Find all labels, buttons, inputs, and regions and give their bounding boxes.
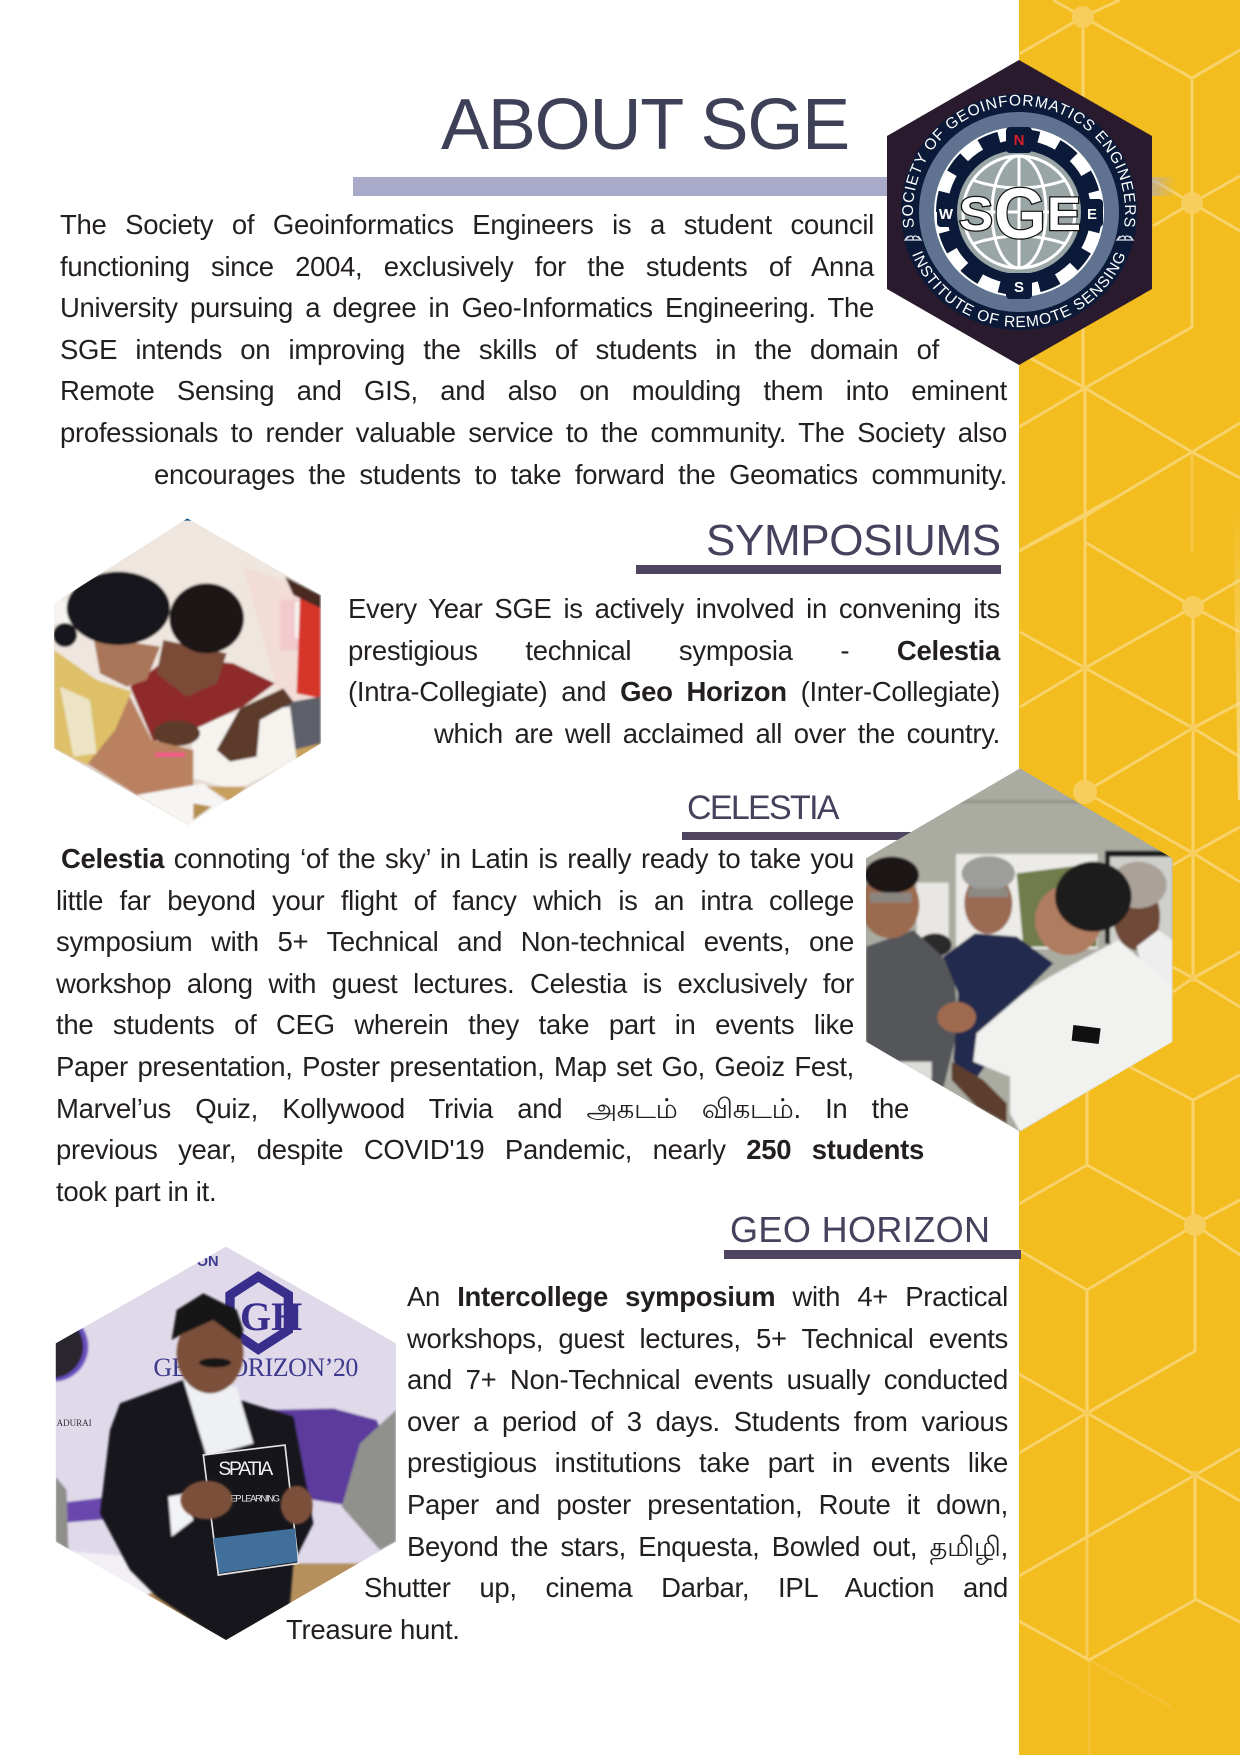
text block: geo horizon: workshops, guest lectures, 5+ Technical events <box>407 1323 1008 1354</box>
text block: celestia: took part in it. <box>56 1176 216 1207</box>
SGE wordmark: E <box>1047 187 1081 240</box>
photo: guest holding Spatia magazine: DEEP LEARNING <box>220 1494 280 1504</box>
compass tabs <box>937 127 1103 299</box>
text block: celestia: Paper presentation, Poster presentation, Map set Go, Geoiz Fest, <box>56 1051 854 1082</box>
text block: about SGE: The Society of Geoinformatics Engineers is a student council <box>60 209 874 240</box>
text block: about SGE <box>60 209 1008 490</box>
globe lines <box>963 156 1075 268</box>
logo: SGE hexagon emblem <box>887 60 1152 365</box>
text block: geo horizon: Shutter up, cinema Darbar, IPL Auction and <box>364 1572 1008 1603</box>
heading: celestia: CELESTIA <box>687 789 838 827</box>
text block: geo horizon: over a period of 3 days. Students from various <box>407 1406 1008 1437</box>
circular logo text: SOCIETY OF GEOINFORMATICS ENGINEERS <box>902 94 1136 228</box>
text block: geo horizon <box>286 1281 1008 1645</box>
compass letters: E <box>1087 206 1097 223</box>
text block: geo horizon: Paper and poster presentation, Route it down, <box>407 1489 1008 1520</box>
geo horizon underline bar <box>724 1250 1021 1259</box>
text block: celestia <box>56 843 924 1207</box>
title underline bar <box>353 177 887 196</box>
text block: about SGE: professionals to render valuable service to the community. The Society also <box>60 417 1007 448</box>
text block: celestia: Marvel’us Quiz, Kollywood Trivia and அகடம் விகடம். In the <box>56 1093 909 1124</box>
heading: symposiums: SYMPOSIUMS <box>706 516 1001 565</box>
text block: symposiums: Every Year SGE is actively involved in convening its <box>348 593 1000 624</box>
text block: geo horizon: Treasure hunt. <box>286 1614 460 1645</box>
text block: about SGE: encourages the students to take forward the Geomatics community. <box>154 459 1007 490</box>
text block: symposiums <box>348 593 1000 749</box>
text block: about SGE: functioning since 2004, exclusively for the students of Anna <box>60 251 874 282</box>
text block: geo horizon: Beyond the stars, Enquesta, Bowled out, தமிழி, <box>407 1531 1008 1562</box>
yellow hexagon side panel <box>1019 0 1240 1755</box>
text block: celestia: workshop along with guest lectures. Celestia is exclusively for <box>56 968 854 999</box>
symposiums underline bar <box>636 565 1001 574</box>
text block: about SGE: University pursuing a degree in Geo-Informatics Engineering. The <box>60 292 874 323</box>
celestia underline bar <box>682 832 912 840</box>
photo: guest holding Spatia magazine <box>56 1246 396 1640</box>
photo: professors in conversation <box>866 768 1173 1132</box>
text block: geo horizon: prestigious institutions take part in events like <box>407 1447 1008 1478</box>
title: ABOUT SGE <box>441 85 849 165</box>
circular logo text <box>902 94 1136 328</box>
photo: students working at a table <box>54 518 321 825</box>
photo: guest holding Spatia magazine: ADURAI <box>57 1418 92 1428</box>
text block: about SGE: SGE intends on improving the skills of students in the domain of <box>60 334 939 365</box>
photo: guest holding Spatia magazine: GH <box>240 1294 302 1339</box>
text block: celestia: the students of CEG wherein they take part in events like <box>56 1009 854 1040</box>
text block: symposiums: prestigious technical symposia - Celestia <box>348 635 1000 666</box>
SGE wordmark: S <box>959 187 993 240</box>
text block: symposiums: which are well acclaimed all over the country. <box>434 718 1000 749</box>
text block: about SGE: Remote Sensing and GIS, and also on moulding them into eminent <box>60 375 1007 406</box>
text block: celestia: little far beyond your flight of fancy which is an intra college <box>56 885 854 916</box>
text block: celestia: previous year, despite COVID'19 Pandemic, nearly 250 students <box>56 1134 924 1165</box>
compass letters: W <box>939 206 954 223</box>
heading: geo horizon: GEO HORIZON <box>730 1209 990 1250</box>
compass letters: S <box>1014 279 1024 296</box>
text block: celestia: symposium with 5+ Technical and Non-technical events, one <box>56 926 854 957</box>
text block: symposiums: (Intra-Collegiate) and Geo Horizon (Inter-Collegiate) <box>348 676 1000 707</box>
SGE wordmark <box>959 175 1081 254</box>
text block: celestia: Celestia connoting ‘of the sky’ in Latin is really ready to take you <box>61 843 854 874</box>
SGE wordmark: G <box>994 175 1046 254</box>
compass letters <box>939 132 1097 296</box>
text block: geo horizon: An Intercollege symposium with 4+ Practical <box>407 1281 1008 1312</box>
circular logo text: INSTITUTE OF REMOTE SENSING <box>912 251 1124 328</box>
compass letters: N <box>1014 132 1024 149</box>
photo: guest holding Spatia magazine: GEO HORIZON’20 <box>153 1353 358 1382</box>
book icons <box>905 236 1133 240</box>
photo: guest holding Spatia magazine: ON <box>197 1254 219 1270</box>
text block: geo horizon: and 7+ Non-Technical events usually conducted <box>407 1364 1008 1395</box>
photo: guest holding Spatia magazine: SPATIA <box>218 1459 273 1480</box>
